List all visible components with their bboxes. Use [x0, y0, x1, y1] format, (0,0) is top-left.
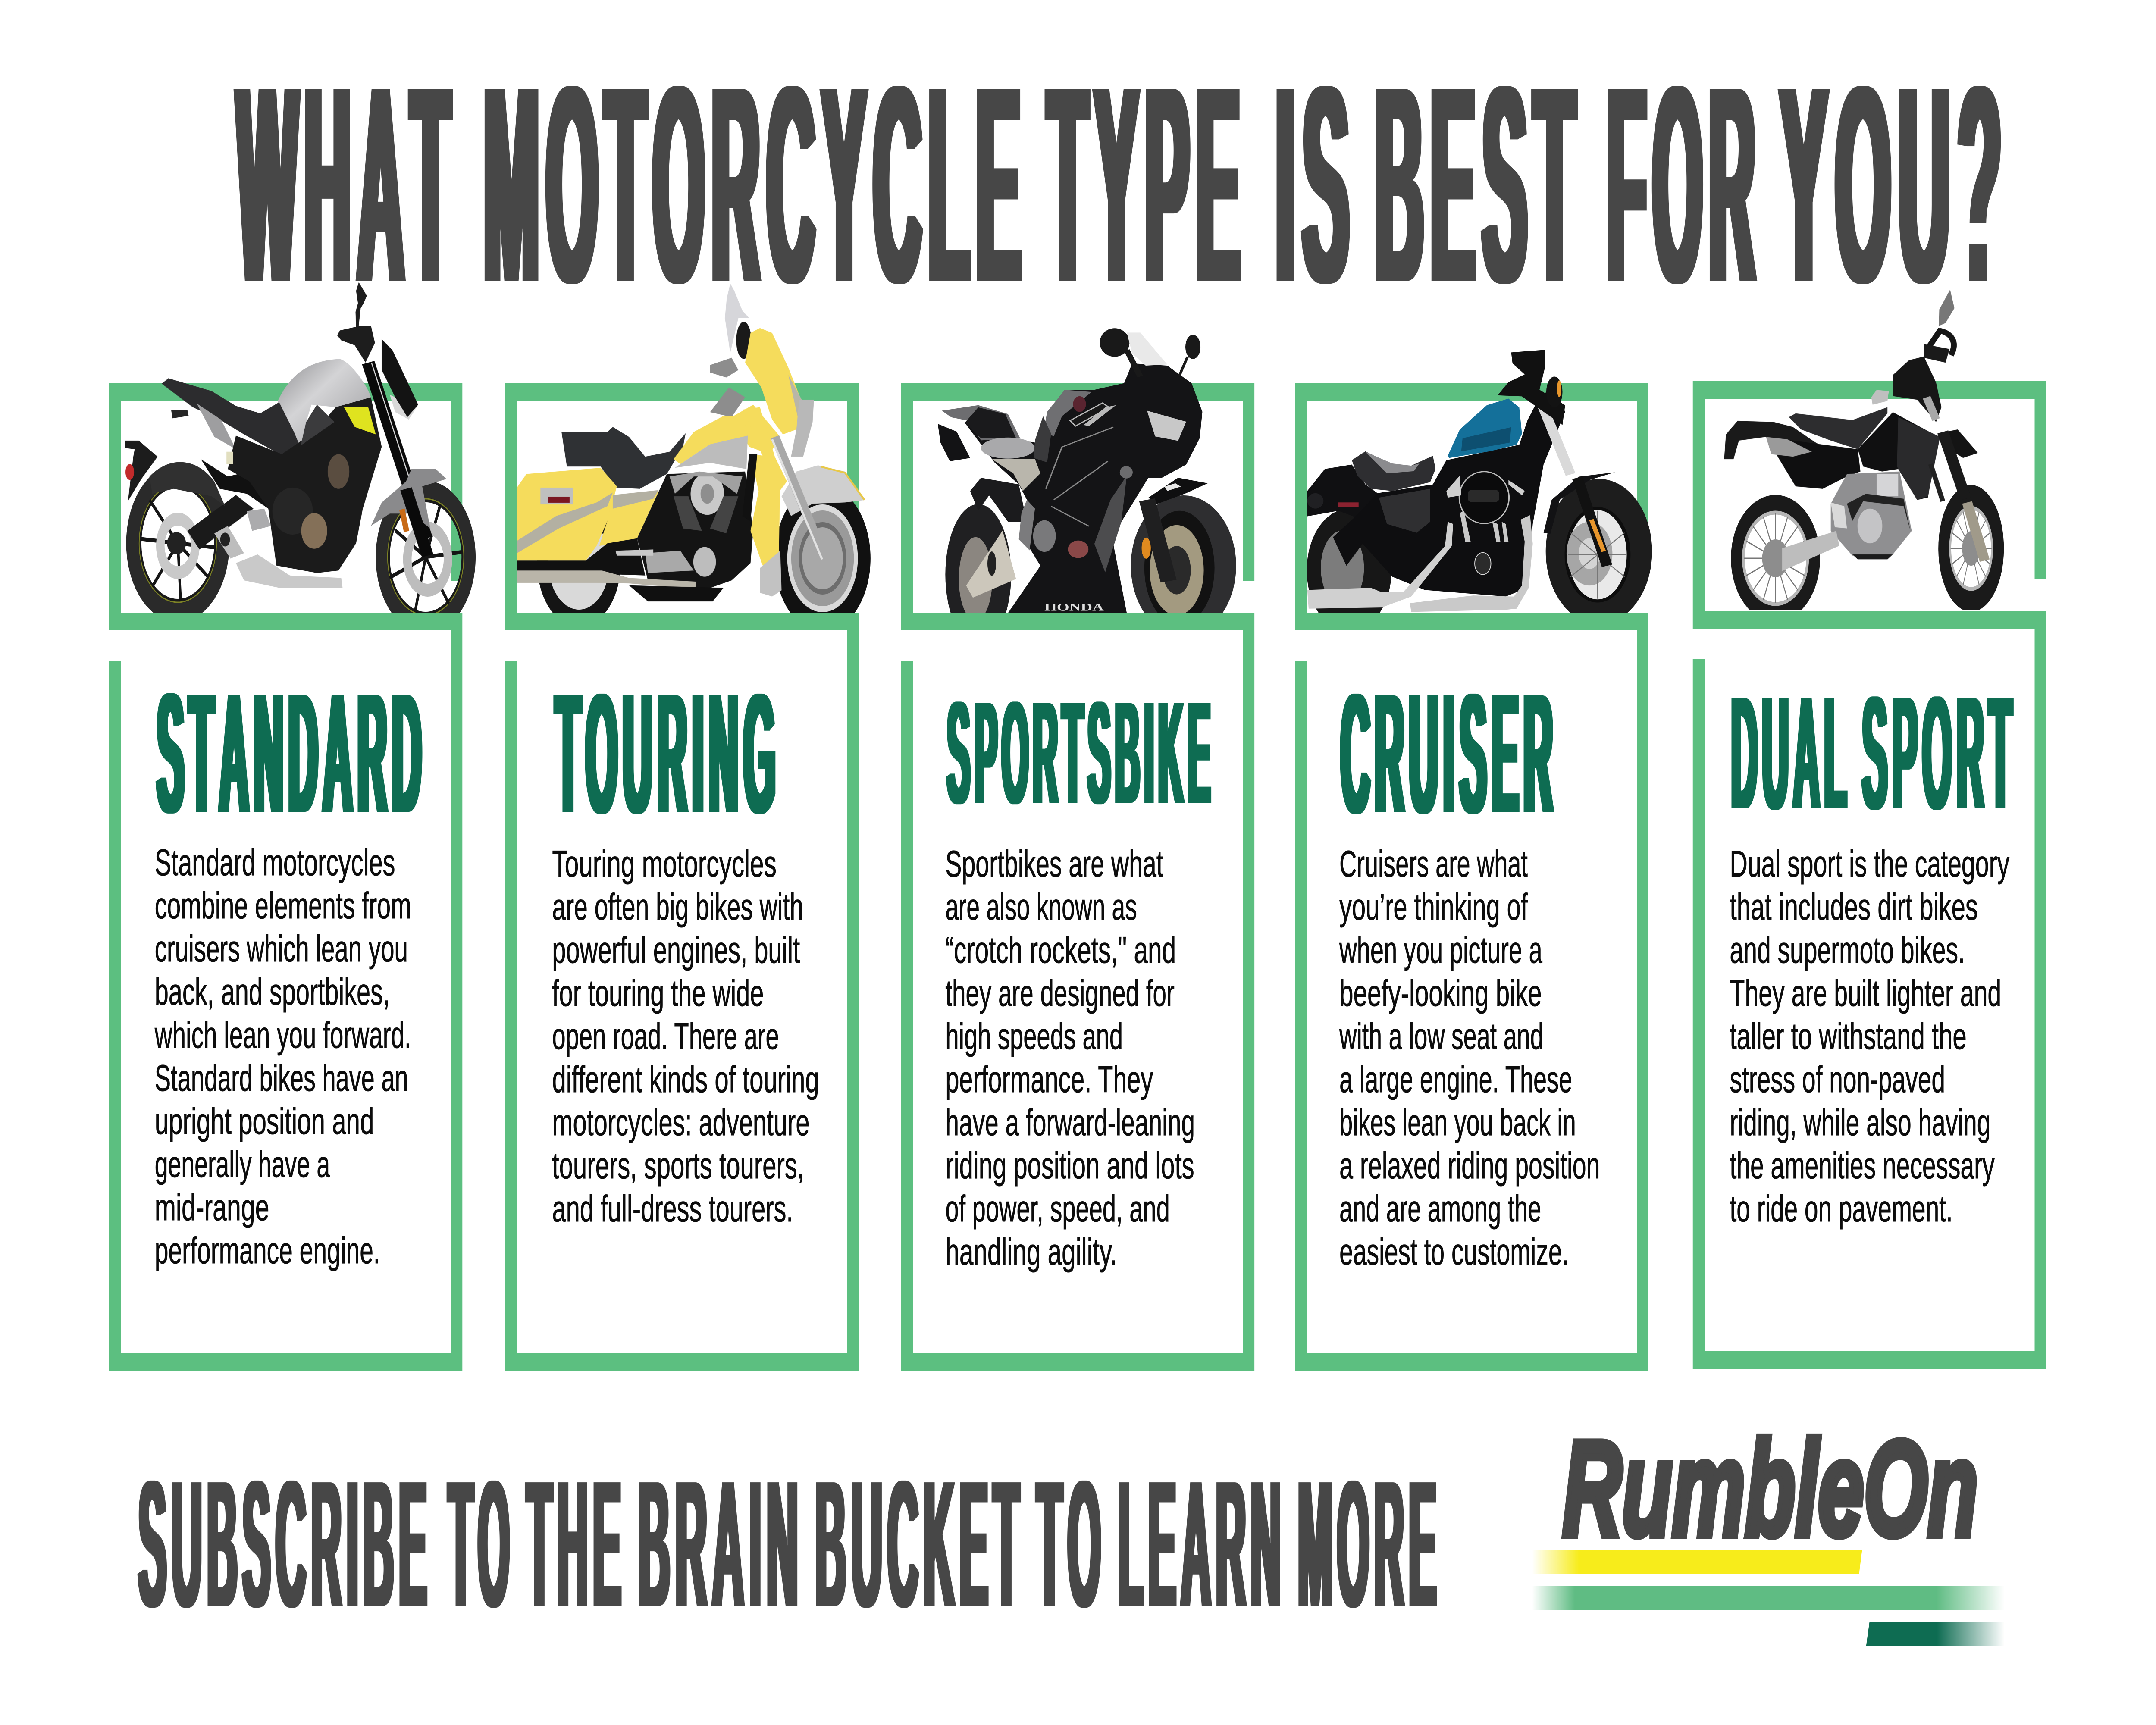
- heading: standard: STANDARD: [157, 658, 426, 848]
- text: touring description: different kinds of touring: [552, 1059, 819, 1100]
- text: standard description: back, and sportbikes,: [155, 971, 390, 1013]
- text: cruiser description: bikes lean you back in: [1339, 1102, 1576, 1143]
- heading: touring: TOURING: [555, 659, 780, 848]
- call to action: TO: [448, 1443, 514, 1645]
- text: sportsbike description: of power, speed, and: [945, 1188, 1170, 1230]
- title: YOU?: [1780, 29, 2009, 341]
- text: dual sport description: taller to withstand the: [1730, 1016, 1967, 1057]
- panel: cruiser: [1295, 350, 1652, 1371]
- text: touring description: [552, 843, 819, 1230]
- panel: touring: [505, 283, 865, 1371]
- text: cruiser description: and are among the: [1339, 1188, 1541, 1230]
- panel: dual sport: [1693, 290, 2046, 1369]
- title: MOTORCYCLE: [484, 28, 1028, 341]
- text: cruiser description: a large engine. These: [1339, 1059, 1572, 1100]
- text: cruiser description: Cruisers are what: [1339, 843, 1528, 885]
- frame: cruiser: [1295, 383, 1648, 1371]
- text: standard description: Standard motorcycles: [155, 842, 395, 883]
- call to action: SUBSCRIBE: [138, 1444, 432, 1644]
- text: sportsbike description: riding position and lots: [945, 1145, 1194, 1187]
- title: TYPE: [1047, 28, 1247, 341]
- text: touring description: Touring motorcycles: [552, 843, 777, 885]
- text: cruiser description: [1339, 843, 1600, 1273]
- frame: dual sport: [1693, 381, 2046, 1369]
- text: sportsbike description: are also known as: [945, 886, 1137, 928]
- logo stripe: green: [1532, 1586, 2004, 1610]
- text: touring description: tourers, sports tourers,: [552, 1145, 804, 1187]
- text: dual sport description: stress of non-paved: [1730, 1059, 1945, 1100]
- logo: RumbleOn: [1532, 1413, 2004, 1646]
- call to action: THE: [526, 1444, 626, 1644]
- text: sportsbike description: have a forward-leaning: [945, 1102, 1195, 1143]
- text: sportsbike description: high speeds and: [945, 1016, 1123, 1057]
- text: cruiser description: easiest to customize.: [1339, 1231, 1569, 1273]
- frame: touring: [505, 383, 859, 1371]
- text: standard description: cruisers which lean you: [155, 928, 408, 970]
- icon: sportsbike motorcycle: [938, 328, 1236, 645]
- text: standard description: mid-range: [155, 1187, 270, 1228]
- text: cruiser description: with a low seat and: [1339, 1016, 1543, 1057]
- text: touring description: motorcycles: adventure: [552, 1102, 809, 1143]
- text: touring description: are often big bikes with: [552, 886, 803, 928]
- title: WHAT: [237, 28, 457, 341]
- text: standard description: which lean you forward.: [154, 1014, 411, 1056]
- text: cruiser description: when you picture a: [1339, 930, 1542, 971]
- icon: touring motorcycle: [517, 283, 865, 621]
- text: standard description: generally have a: [155, 1144, 330, 1185]
- text: sportsbike description: handling agility.: [945, 1231, 1117, 1273]
- text: touring description: and full-dress tourers.: [552, 1188, 793, 1230]
- logo stripe: yellow: [1532, 1550, 1862, 1574]
- text: touring description: open road. There are: [552, 1016, 779, 1057]
- call to action: [138, 1443, 1441, 1645]
- text: standard description: Standard bikes have an: [155, 1058, 408, 1099]
- title: IS: [1275, 28, 1357, 341]
- label: honda badge: HONDA: [1044, 601, 1104, 614]
- text: sportsbike description: performance. They: [945, 1059, 1153, 1100]
- frame: sportsbike: [901, 383, 1254, 1371]
- icon: cruiser motorcycle: [1307, 350, 1652, 632]
- text: standard description: [154, 842, 411, 1271]
- text: sportsbike description: “crotch rockets," and: [945, 930, 1176, 971]
- panel: standard: [109, 282, 470, 1371]
- heading: dual sport: [1731, 664, 2017, 843]
- text: cruiser description: beefy-looking bike: [1339, 973, 1542, 1014]
- call to action: BRAIN: [639, 1444, 803, 1644]
- icon: standard motorcycle: [125, 282, 470, 624]
- frame: standard: [109, 383, 462, 1371]
- text: cruiser description: a relaxed riding position: [1339, 1145, 1600, 1187]
- heading: dual sport: DUAL: [1731, 664, 1851, 843]
- panel: sportsbike: [901, 328, 1254, 1371]
- text: dual sport description: [1730, 843, 2010, 1230]
- call to action: TO: [1037, 1444, 1106, 1644]
- text: dual sport description: the amenities necessary: [1730, 1145, 1995, 1187]
- logo wordmark: RumbleOn: [1563, 1413, 1978, 1563]
- text: standard description: performance engine.: [155, 1230, 380, 1271]
- text: dual sport description: that includes dirt bikes: [1730, 886, 1978, 928]
- call to action: LEARN: [1118, 1444, 1286, 1645]
- text: touring description: for touring the wide: [552, 973, 764, 1014]
- logo stripe: dark green: [1866, 1622, 2004, 1646]
- text: dual sport description: to ride on pavement.: [1730, 1188, 1953, 1230]
- text: standard description: upright position and: [155, 1101, 374, 1142]
- text: sportsbike description: they are designed for: [945, 973, 1175, 1014]
- icon: dual sport motorcycle: [1724, 290, 1998, 614]
- title: FOR: [1607, 28, 1762, 341]
- text: dual sport description: They are built lighter and: [1730, 973, 2001, 1014]
- title: [237, 28, 2009, 341]
- heading: dual sport: SPORT: [1862, 664, 2017, 843]
- title: BEST: [1375, 28, 1582, 341]
- call to action: MORE: [1298, 1444, 1441, 1645]
- call to action: BUCKET: [815, 1444, 1025, 1644]
- text: cruiser description: you’re thinking of: [1339, 886, 1528, 928]
- heading: sportsbike: SPORTSBIKE: [947, 672, 1215, 834]
- text: dual sport description: riding, while also having: [1730, 1102, 1990, 1143]
- text: dual sport description: Dual sport is the category: [1730, 843, 2010, 885]
- text: dual sport description: and supermoto bikes.: [1730, 930, 1965, 971]
- text: sportsbike description: Sportbikes are what: [945, 843, 1163, 885]
- text: standard description: combine elements from: [155, 885, 411, 927]
- text: touring description: powerful engines, built: [552, 930, 800, 971]
- text: sportsbike description: [945, 843, 1195, 1273]
- heading: cruiser: CRUISER: [1341, 659, 1558, 848]
